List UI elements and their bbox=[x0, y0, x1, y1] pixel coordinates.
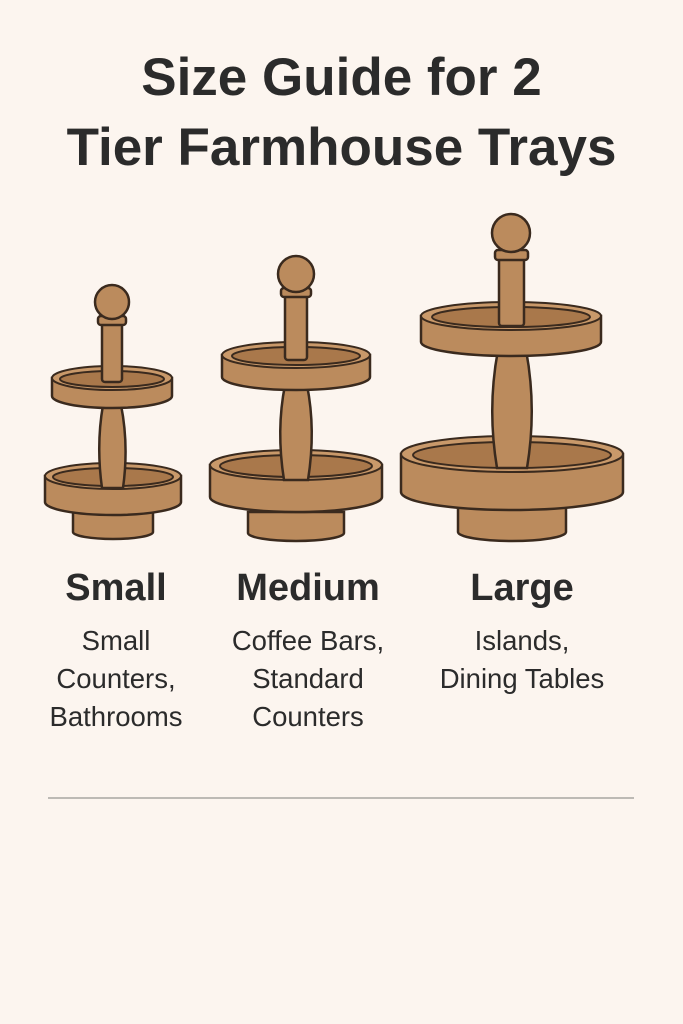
icon: large tray bbox=[401, 214, 623, 541]
label: medium: Coffee Bars, bbox=[232, 625, 384, 656]
label: medium: Standard bbox=[252, 663, 364, 694]
title: Size Guide for 2 bbox=[141, 48, 542, 107]
label: large: Dining Tables bbox=[440, 663, 604, 694]
trays illustration bbox=[44, 212, 624, 542]
icon: small tray bbox=[45, 285, 181, 539]
label: large: Islands, bbox=[475, 625, 569, 656]
label: large: Large bbox=[470, 567, 574, 609]
label: medium: Medium bbox=[236, 567, 380, 609]
label: medium bbox=[232, 567, 384, 732]
label: small: Bathrooms bbox=[50, 701, 182, 732]
label: medium: Counters bbox=[252, 701, 364, 732]
label: large bbox=[440, 567, 604, 694]
title: Tier Farmhouse Trays bbox=[67, 118, 616, 177]
label: small: Small bbox=[82, 625, 150, 656]
icon: medium tray bbox=[210, 256, 382, 541]
label: small: Small bbox=[65, 567, 167, 609]
label: small: Counters, bbox=[56, 663, 176, 694]
label: small bbox=[50, 567, 182, 732]
title bbox=[67, 48, 616, 177]
